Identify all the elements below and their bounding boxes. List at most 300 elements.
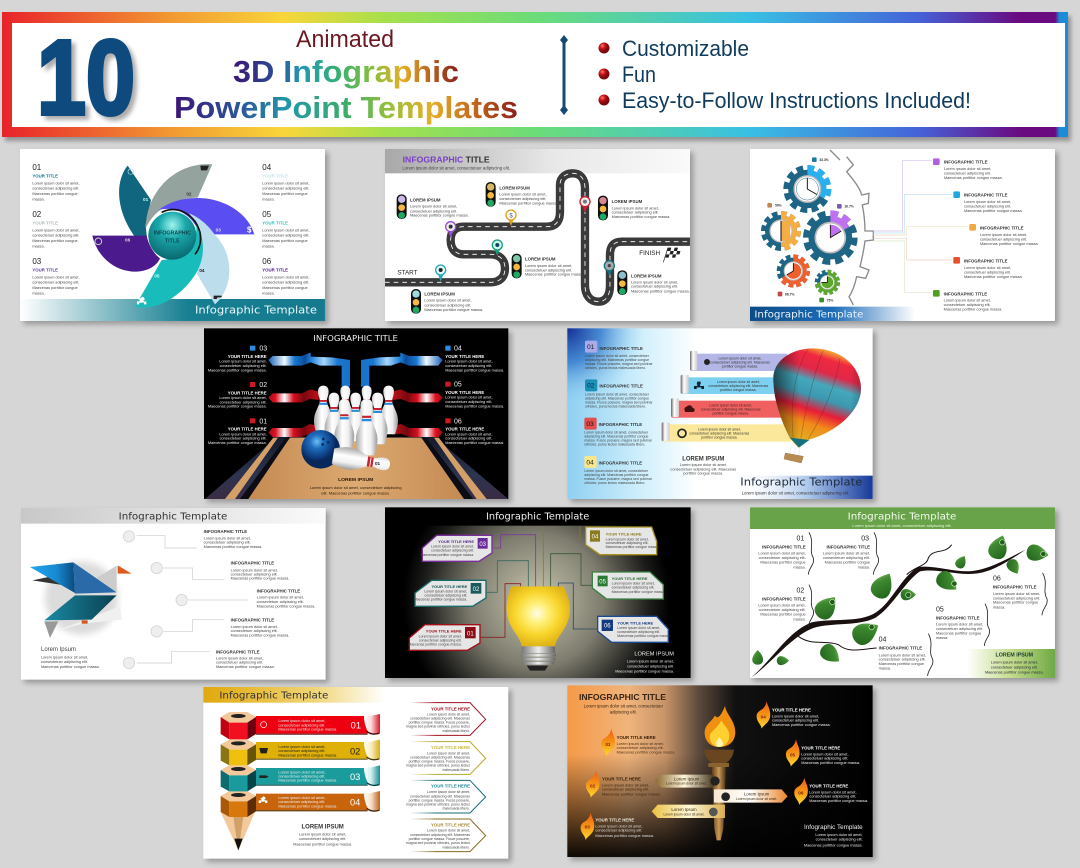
text items right: 06 [993,576,1001,583]
slide header [203,687,385,703]
ribbons: consectetuer adipiscing elit. Maecenas [689,431,749,435]
road stop labels: Maecenas porttitor congue massa. [410,214,469,218]
legend rows: consectetuer adipiscing elit. [944,303,991,307]
label 05: Lorem ipsum dolor sit amet, [612,582,655,586]
numbered list: adipiscing elit. Maecenas porttitor congue [584,435,649,439]
text rows: consectetuer adipiscing elit. [231,629,278,633]
banner white panel [12,23,1065,127]
legend rows: Lorem ipsum dolor sit amet, [980,233,1027,237]
ribbon text and numbers [259,719,361,808]
bottom note: Lorem ipsum dolor sit amet, [627,660,674,664]
text items left: massa. [793,617,806,621]
right items: YOUR TITLE [262,173,288,178]
slide 4: bowling infographic [204,328,512,502]
label 05: YOUR TITLE HERE [612,576,648,581]
ribbon text and numbers: Maecenas porttitor congue massa. [278,728,337,732]
text items left: INFOGRAPHIC TITLE [826,544,870,549]
numbered list: Lorem ipsum dolor sit amet, consectetuer [585,354,650,358]
left captions: consectetuer adipiscing elit. [617,746,664,750]
flame icons: 04 [761,714,766,719]
text items right: consectetuer adipiscing elit. [993,596,1040,600]
road stop labels: consectetuer adipiscing elit. [499,197,546,201]
legend rows: consectetuer adipiscing elit. [980,237,1027,241]
road stop labels: consectetuer adipiscing elit. [410,209,457,213]
left captions: consectetuer adipiscing elit. [595,829,642,833]
right captions: Lorem ipsum dolor sit amet, [809,791,857,795]
road stop labels: Lorem ipsum dolor sit amet, [525,264,572,268]
right arrow captions: consectetuer adipiscing elit. Maecenas [410,717,470,721]
legend rows: Maecenas porttitor congue massa. [944,176,1003,180]
lane caption: LOREM IPSUM [338,477,373,483]
flame icons: 01 [605,742,611,747]
right items: YOUR TITLE [262,267,288,272]
legend rows: Lorem ipsum dolor sit amet, [964,200,1011,204]
right arrow captions: YOUR TITLE HERE [431,745,470,750]
lorem box [967,649,1055,678]
percentage labels [767,157,854,302]
text rows: Maecenas porttitor congue massa. [231,577,289,581]
text rows: Maecenas porttitor congue massa. [257,604,315,608]
slide 7: light bulb infographic [385,507,694,681]
label 06: YOUR TITLE HERE [617,621,654,626]
legend rows: Maecenas porttitor congue massa. [964,275,1023,279]
text items left: INFOGRAPHIC TITLE [762,544,806,549]
numbered list: adipiscing elit. Maecenas porttitor congue [585,396,649,400]
arrow tags: Lorem Ipsum [744,792,770,797]
origami bird [30,561,132,638]
banner title: PowerPoint Templates [174,90,518,125]
right arrow captions: Lorem ipsum dolor sit amet, [427,790,470,794]
flame icons: 03 [585,824,590,829]
bullet list: Easy-to-Follow Instructions Included! [622,88,971,113]
centre sphere [148,212,196,260]
left items: massa. [32,291,45,295]
right labels: Lorem ipsum dolor sit amet, [445,360,493,364]
map pins: $ [509,213,513,219]
bottom note [804,824,863,847]
text rows: consectetuer adipiscing elit. [204,541,251,545]
slide header [385,149,690,173]
slide title: Infographic Template [486,512,590,523]
label 04: consectetuer adipiscing elit. [606,541,648,545]
lorem box: LOREM IPSUM [996,652,1034,658]
start and finish labels: START [397,269,418,276]
numbered list: 04 [586,459,594,466]
left labels: 03 [259,346,267,353]
right captions: YOUR TITLE HERE [801,746,840,751]
numbered list: ultricies, purus lectus malesuada libero. [585,404,646,408]
lorem note: Lorem Ipsum [41,647,76,653]
percentage labels: 50% [775,204,782,208]
blade numbers and icons: 03 [216,227,221,232]
left items: consectetuer adipiscing elit. [32,281,79,285]
right labels [445,346,504,445]
road stop labels [410,185,690,312]
left captions: YOUR TITLE HERE [602,776,641,781]
right captions: consectetuer adipiscing elit. [772,718,819,722]
text items right: consectetuer adipiscing elit. [936,627,983,631]
legend rows: INFOGRAPHIC TITLE [944,159,988,164]
lane caption: elit. Maecenas porttitor congue massa. [321,490,390,495]
right items: Maecenas porttitor congue [262,286,308,290]
left labels [208,346,267,445]
centre sphere: INFOGRAPHIC [154,230,191,236]
right captions [772,708,868,803]
bowling ball [301,430,340,469]
numbered list: INFOGRAPHIC TITLE [599,346,643,351]
numbered list: massa. Fusce posuere, magna sed pulvinar [585,400,653,404]
right arrow captions: YOUR TITLE HERE [431,822,470,827]
text rows: Lorem ipsum dolor sit amet, [204,537,251,541]
double-headed divider arrow [560,35,568,115]
round icons [123,531,187,669]
right items: YOUR TITLE [262,220,288,225]
ribbon text and numbers: 03 [350,772,360,782]
right arrow captions: Lorem ipsum dolor sit amet, [427,712,470,716]
title bar [733,476,873,499]
left items: Maecenas porttitor congue [32,239,78,243]
right labels: Maecenas porttitor congue massa. [445,441,504,445]
ribbon text and numbers: consectetuer adipiscing elit. [278,723,325,727]
wires [480,526,598,637]
bullet list: Fun [622,62,656,87]
road stop labels: LOREM IPSUM [499,185,530,190]
label 05 [592,572,665,599]
right arrow captions: malesuada libero. [442,768,470,772]
text rows: INFOGRAPHIC TITLE [257,589,300,594]
right captions: Maecenas porttitor congue massa. [809,799,868,803]
centre note: LOREM IPSUM [682,456,724,462]
right items: Lorem ipsum dolor sit amet, [262,275,310,279]
left captions: YOUR TITLE HERE [595,818,634,823]
slide title: Lorem ipsum dolor sit amet, consectetuer [584,703,664,708]
ribbon text and numbers: consectetuer adipiscing elit. [278,774,325,778]
road stop labels: consectetuer adipiscing elit. [424,303,471,307]
numbered list: Lorem ipsum dolor sit amet, consectetuer [584,469,649,473]
left labels: consectetuer adipiscing elit. [220,437,267,441]
right items: consectetuer adipiscing elit. [262,281,309,285]
left items: massa. [32,244,45,248]
lane caption: Lorem ipsum dolor sit amet, consectetuer adipiscing [310,485,402,490]
right labels: 04 [454,346,462,353]
blade numbers and icons: 05 [154,274,160,279]
label 01: Maecenas porttitor congue massa. [408,642,462,646]
right labels: Lorem ipsum dolor sit amet, [445,396,493,400]
right arrow captions: porttitor congue massa. Fusce posuere, [409,760,470,764]
road stop labels: LOREM IPSUM [410,197,441,202]
left labels: Lorem ipsum dolor sit amet, [219,396,267,400]
right arrow captions: malesuada libero. [442,845,470,849]
text items left [758,535,870,621]
blade numbers and icons [95,166,252,304]
label 06 [598,616,671,642]
legend rows: Lorem ipsum dolor sit amet, [944,299,991,303]
left items: Maecenas porttitor congue [32,192,78,196]
text items right: 04 [879,636,887,643]
lorem box: Maecenas porttitor congue massa. [985,671,1044,675]
bowling pins [314,386,398,455]
right labels: Maecenas porttitor congue massa. [445,404,504,408]
text rows: Maecenas porttitor congue massa. [204,545,262,549]
label 02: consectetuer adipiscing elit. [425,593,467,597]
centre note: Lorem ipsum dolor sit amet, [299,833,346,837]
label 02: YOUR TITLE HERE [431,584,468,589]
right items: 04 [262,163,272,172]
left items: Lorem ipsum dolor sit amet, [32,228,80,232]
text rows: consectetuer adipiscing elit. [231,572,278,576]
ribbon text and numbers: Maecenas porttitor congue massa. [278,804,337,808]
text rows: consectetuer adipiscing elit. [257,600,304,604]
slide title [579,692,666,714]
right arrow captions: consectetuer adipiscing elit. Maecenas [410,794,470,798]
slide 1: pinwheel infographic [20,149,328,324]
gears [764,168,854,293]
slide 5: hot air balloon infographic [567,328,876,502]
start and finish labels: FINISH [639,250,660,257]
blade numbers and icons: $ [247,225,252,234]
slide 10: torch infographic [567,685,876,860]
left labels: Lorem ipsum dolor sit amet, [219,432,267,436]
arrow tags: Lorem Ipsum [674,776,700,781]
centre note: consectetuer adipiscing elit. [299,837,346,841]
right labels: consectetuer adipiscing elit. [445,400,492,404]
legend rows: INFOGRAPHIC TITLE [980,225,1024,230]
label 05: Maecenas porttitor congue massa. [612,590,665,594]
right arrow captions: malesuada libero. [442,729,470,733]
right labels: Lorem ipsum dolor sit amet, [445,432,493,436]
title bar: Infographic Template [740,477,862,489]
left captions: Lorem ipsum dolor sit amet, [602,783,649,787]
right captions: consectetuer adipiscing elit. [801,756,848,760]
label 06: consectetuer adipiscing elit. [617,630,660,634]
right captions: Maecenas porttitor congue massa. [772,723,831,727]
ribbon text and numbers: Maecenas porttitor congue massa. [278,753,337,757]
ribbons: porttitor congue massa. [722,365,758,369]
road stop labels: LOREM IPSUM [525,257,556,262]
slide title: INFOGRAPHIC TITLE [313,333,398,343]
banner title: Animated [296,26,394,53]
left captions [595,735,675,838]
label 03: consectetuer adipiscing elit. [431,549,474,553]
left items: 02 [32,210,42,219]
right labels: YOUR TITLE HERE [445,390,484,395]
text items right: massa. [936,636,948,640]
legend rows: INFOGRAPHIC TITLE [944,291,987,296]
slide header [750,507,1055,529]
percentage labels: 16.7% [844,205,854,209]
centre note [670,456,736,476]
legend rows: consectetuer adipiscing elit. [964,204,1011,208]
right captions: Lorem ipsum dolor sit amet, [772,714,819,718]
label 05: consectetuer adipiscing elit. [612,586,654,590]
title bar: Infographic Template [754,310,863,321]
right arrow captions: magna sed pulvinar ultricies, purus lectus [406,841,470,845]
right arrow captions: Lorem ipsum dolor sit amet, [427,751,470,755]
blade numbers and icons: 04 [199,268,205,273]
centre note: Lorem ipsum dolor sit amet, [680,463,727,467]
numbered list: massa. Fusce posuere, magna sed pulvinar [584,477,653,481]
text items right: Maecenas porttitor congue [936,631,981,635]
ribbon text and numbers: consectetuer adipiscing elit. [278,749,325,753]
road stop labels: LOREM IPSUM [631,273,662,278]
right labels: YOUR TITLE HERE [445,427,484,432]
text items left: massa. [858,565,870,569]
ribbons [256,714,380,811]
right items: massa. [262,291,275,295]
bottom note: Maecenas porttitor congue massa. [615,670,674,674]
ribbons: porttitor congue massa. [712,411,749,415]
slide header [21,508,326,524]
bottom note: consectetuer adipiscing elit. [627,664,674,668]
left captions: Lorem ipsum dolor sit amet, [595,825,643,829]
big number 10: 10 [37,19,135,137]
road stop labels: Lorem ipsum dolor sit amet, [424,299,472,303]
text items left: massa. [793,565,806,569]
label 03: YOUR TITLE HERE [438,539,474,544]
left captions: Lorem ipsum dolor sit amet, [617,742,664,746]
label 05: 05 [599,579,607,585]
left items: YOUR TITLE [32,267,58,272]
bowling lane [205,437,508,499]
right arrow captions: Lorem ipsum dolor sit amet, [427,829,470,833]
left labels: consectetuer adipiscing elit. [220,364,267,368]
legend rows: Lorem ipsum dolor sit amet, [944,167,991,171]
slide 2: road map infographic [385,149,693,324]
label 03: 03 [479,542,487,548]
label 04: 04 [592,534,599,540]
numbered list: Lorem ipsum dolor sit amet, consectetuer [584,431,649,435]
rainbow frame [2,12,1068,137]
text items left: 02 [797,587,804,594]
label 01: YOUR TITLE HERE [426,629,462,634]
label 04: Lorem ipsum dolor sit amet, [606,537,649,541]
text items left: consectetuer adipiscing elit. [823,556,870,560]
title bar: Lorem ipsum dolor sit amet, consectetuer adipiscing elit. [742,490,849,495]
numbered list: 02 [587,383,595,390]
text items left: Maecenas porttitor congue [760,613,806,617]
slide header: INFOGRAPHIC TITLE [403,155,490,165]
right arrow captions: magna sed pulvinar ultricies, purus lectus [406,764,470,768]
right arrow captions: consectetuer adipiscing elit. Maecenas [410,756,470,760]
ribbon text and numbers: Maecenas porttitor congue massa. [278,779,337,783]
text items right: Maecenas porttitor congue [993,601,1038,605]
arrow tags [652,775,788,818]
right items: massa. [262,197,275,201]
right labels: YOUR TITLE HERE [445,354,484,359]
right items: Lorem ipsum dolor sit amet, [262,228,310,232]
big number 10: 10 [41,23,139,141]
right labels: Maecenas porttitor congue massa. [445,368,504,372]
centre sphere: TITLE [165,238,180,244]
right arrow captions: malesuada libero. [442,807,470,811]
text items right: INFOGRAPHIC TITLE [993,585,1037,590]
text rows: Lorem ipsum dolor sit amet, [231,568,278,572]
label 02: 02 [473,587,480,593]
centre note: LOREM IPSUM [302,824,344,830]
legend rows: INFOGRAPHIC TITLE [964,192,1008,197]
label 03 [421,535,492,561]
left labels: 01 [259,418,267,425]
road stop labels: consectetuer adipiscing elit. [612,211,659,215]
ribbon text and numbers: 01 [351,720,361,730]
road stop labels: Maecenas porttitor congue massa. [424,308,483,312]
right arrow captions [406,703,486,852]
numbered list: ultricies, purus lectus malesuada libero. [584,481,645,485]
right items [262,163,310,295]
left labels: 02 [259,382,267,389]
road stop labels: Maecenas porttitor congue massa. [612,215,670,219]
ribbons: consectetuer adipiscing elit. Maecenas [710,361,770,365]
ribbon text and numbers: Lorem ipsum dolor sit amet, [278,770,326,774]
legend rows: INFOGRAPHIC TITLE [964,258,1008,263]
numbered list [584,341,653,485]
text rows [204,529,315,669]
banner [2,12,1071,141]
road stop labels: Maecenas porttitor congue massa. [525,273,584,277]
text items left: 01 [797,535,804,542]
ribbons: Lorem ipsum dolor sit amet, [717,380,760,384]
bottom note: Infographic Template [804,824,863,831]
text items left: consectetuer adipiscing elit. [759,556,806,560]
text items left: Maecenas porttitor congue [760,561,806,565]
legend rows: Maecenas porttitor congue massa. [980,242,1039,246]
numbered list: INFOGRAPHIC TITLE [599,422,642,427]
ribbons: consectetuer adipiscing elit. Maecenas [708,384,768,388]
road stop labels: Lorem ipsum dolor sit amet, [612,206,659,210]
centre note: consectetuer adipiscing elit. Maecenas [670,467,736,471]
flame icons [581,701,808,840]
text items right: INFOGRAPHIC TITLE [879,646,922,651]
percentage labels: 66.7% [785,293,794,297]
ribbon text and numbers: 02 [350,746,360,756]
text rows: Maecenas porttitor congue massa. [231,633,289,637]
lane caption [310,477,402,495]
lorem note: Lorem ipsum dolor sit amet, [41,655,88,659]
blade numbers and icons: 01 [143,197,149,202]
percentage labels: 75% [827,298,833,302]
slide 8: branch and leaves infographic [750,507,1058,681]
text rows: INFOGRAPHIC TITLE [231,561,274,566]
right labels: consectetuer adipiscing elit. [445,437,492,441]
numbered list: 03 [586,421,594,428]
text items right: consectetuer adipiscing elit. [879,658,926,662]
label 03: Lorem ipsum dolor sit amet, [431,544,474,548]
right items: Maecenas porttitor congue [262,192,308,196]
banner title: 3D Infographic [233,54,459,89]
numbered list: 01 [587,344,595,351]
slide title: INFOGRAPHIC TITLE [579,692,666,702]
squiggle separators [808,532,1047,676]
text rows: INFOGRAPHIC TITLE [204,529,247,534]
left labels: Maecenas porttitor congue massa. [208,368,267,372]
left items: 03 [32,257,42,266]
road stop labels: Lorem ipsum dolor sit amet, [631,280,678,284]
road stop labels: Maecenas porttitor congue massa. [499,201,558,205]
right items: consectetuer adipiscing elit. [262,187,309,191]
pinwheel blades [92,164,254,308]
road stop labels: LOREM IPSUM [612,199,643,204]
numbered list: massa. Fusce posuere, magna sed pulvinar [584,439,653,443]
text items left: Lorem ipsum dolor sit amet, [823,552,870,556]
flame icons: 06 [798,791,804,796]
text rows: Lorem ipsum dolor sit amet, [257,596,304,600]
numbered list: massa. Fusce posuere, magna sed pulvinar [585,362,653,366]
right labels: 06 [454,418,462,425]
left labels: YOUR TITLE HERE [228,427,267,432]
left items: YOUR TITLE [32,220,58,225]
road stop labels: consectetuer adipiscing elit. [525,268,572,272]
text items right: Lorem ipsum dolor sit amet, [936,623,983,627]
